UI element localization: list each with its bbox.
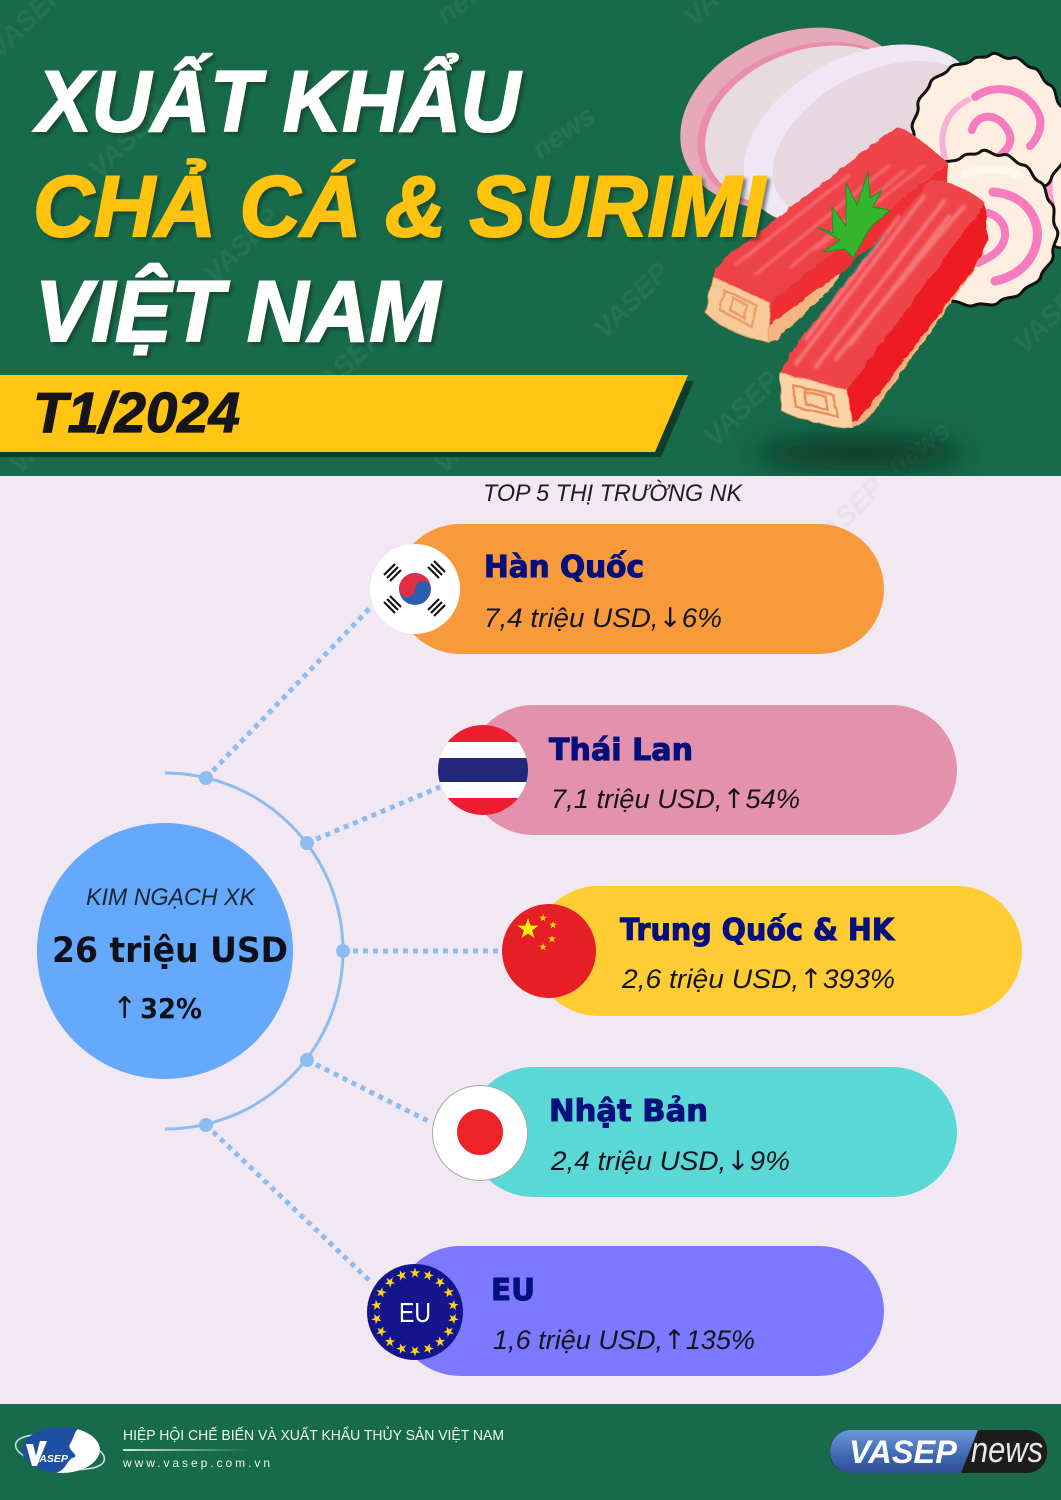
header watermark: VASEP bbox=[697, 364, 785, 452]
market name: Nhật Bản bbox=[549, 1094, 708, 1129]
organisation name: HIỆP HỘI CHẾ BIẾN VÀ XUẤT KHẨU THỦY SẢN VIỆT NAM bbox=[123, 1426, 504, 1444]
market value: 2,4 triệu USD,↓9% bbox=[550, 1146, 790, 1177]
flag: South Korea bbox=[370, 544, 460, 634]
header watermark: VASEP bbox=[197, 201, 285, 289]
header watermark: VASEP bbox=[300, 321, 388, 409]
header watermark: VASEP bbox=[2, 391, 90, 479]
website: www.vasep.com.vn bbox=[122, 1456, 270, 1470]
footer panel bbox=[0, 1404, 1061, 1500]
VASEP news badge: VASEP bbox=[849, 1434, 958, 1470]
total export circle bbox=[37, 823, 293, 1079]
banner text: T1/2024 bbox=[33, 381, 240, 445]
market value: 7,1 triệu USD,↑54% bbox=[551, 784, 800, 815]
header watermark: news bbox=[881, 414, 956, 480]
body watermark: VASEP bbox=[802, 471, 890, 559]
pink fish cake slice bbox=[680, 28, 882, 206]
VASEP logo: VASEP bbox=[33, 1454, 68, 1465]
markets heading: TOP 5 THỊ TRƯỜNG NK bbox=[483, 480, 743, 507]
total value: 26 triệu USD bbox=[52, 931, 288, 971]
total change: 32% bbox=[140, 992, 202, 1025]
food illustration: surimi and crab sticks bbox=[655, 0, 1061, 468]
shadow under crab sticks bbox=[755, 438, 965, 468]
VASEP news badge: news bbox=[971, 1429, 1043, 1470]
header watermark: VASEP bbox=[427, 391, 515, 479]
header watermark: VASEP bbox=[82, 96, 170, 184]
title line 1: XUẤT KHẨU bbox=[33, 54, 522, 150]
market name: Trung Quốc & HK bbox=[620, 913, 896, 948]
header panel bbox=[0, 0, 1061, 480]
title line 2: CHẢ CÁ & SURIMI bbox=[33, 159, 767, 255]
body watermark: VASEP bbox=[477, 1246, 565, 1334]
body watermark: VASEP bbox=[132, 916, 220, 1004]
market card: Thái Lan bbox=[438, 705, 957, 835]
crab stick back highlights bbox=[735, 165, 925, 275]
crab stick back bbox=[705, 127, 948, 342]
narutomaki right bbox=[1046, 168, 1061, 249]
white fish cake slice bbox=[744, 44, 960, 218]
narutomaki bottom bbox=[902, 150, 1058, 306]
garnish leaf bbox=[817, 172, 890, 258]
body watermark bbox=[132, 471, 911, 1334]
period banner bbox=[0, 375, 694, 457]
body watermark: news bbox=[746, 769, 821, 835]
header watermark bbox=[0, 0, 1061, 480]
connector nodes bbox=[199, 771, 350, 1132]
market card: Nhật Bản bbox=[432, 1067, 957, 1197]
flag: Thailand bbox=[438, 725, 528, 815]
market card: Trung Quốc & HK bbox=[502, 886, 1022, 1016]
title bbox=[33, 54, 767, 360]
market value: 2,6 triệu USD, ↑393% bbox=[621, 964, 895, 995]
title line 3: VIỆT NAM bbox=[35, 264, 442, 360]
total label: KIM NGẠCH XK bbox=[86, 884, 256, 911]
header watermark: VASEP bbox=[587, 256, 675, 344]
market card: EU bbox=[367, 1246, 884, 1376]
body watermark: VASEP bbox=[572, 926, 660, 1014]
market name: EU bbox=[491, 1273, 535, 1308]
VASEP logo bbox=[14, 1427, 106, 1473]
narutomaki top bbox=[910, 52, 1061, 188]
crab stick front bbox=[780, 180, 988, 428]
market value: 7,4 triệu USD,↓6% bbox=[484, 603, 722, 634]
market card: Hàn Quốc bbox=[370, 524, 884, 654]
dotted connectors bbox=[206, 606, 502, 1283]
flag: Japan bbox=[432, 1086, 528, 1180]
market name: Hàn Quốc bbox=[484, 550, 644, 585]
crab stick front highlights bbox=[795, 195, 965, 368]
market value: 1,6 triệu USD,↑135% bbox=[493, 1325, 755, 1356]
header watermark: news bbox=[526, 99, 601, 165]
VASEP news badge bbox=[830, 1429, 1047, 1473]
total change: ↑ bbox=[112, 991, 137, 1026]
body watermark: VASEP bbox=[652, 1076, 740, 1164]
flag: EU bbox=[367, 1264, 463, 1360]
flag: China bbox=[502, 904, 596, 998]
connector arc bbox=[165, 773, 343, 1129]
flag: EU: EU bbox=[399, 1297, 431, 1328]
body watermark: news bbox=[836, 1129, 911, 1195]
market name: Thái Lan bbox=[549, 733, 693, 768]
